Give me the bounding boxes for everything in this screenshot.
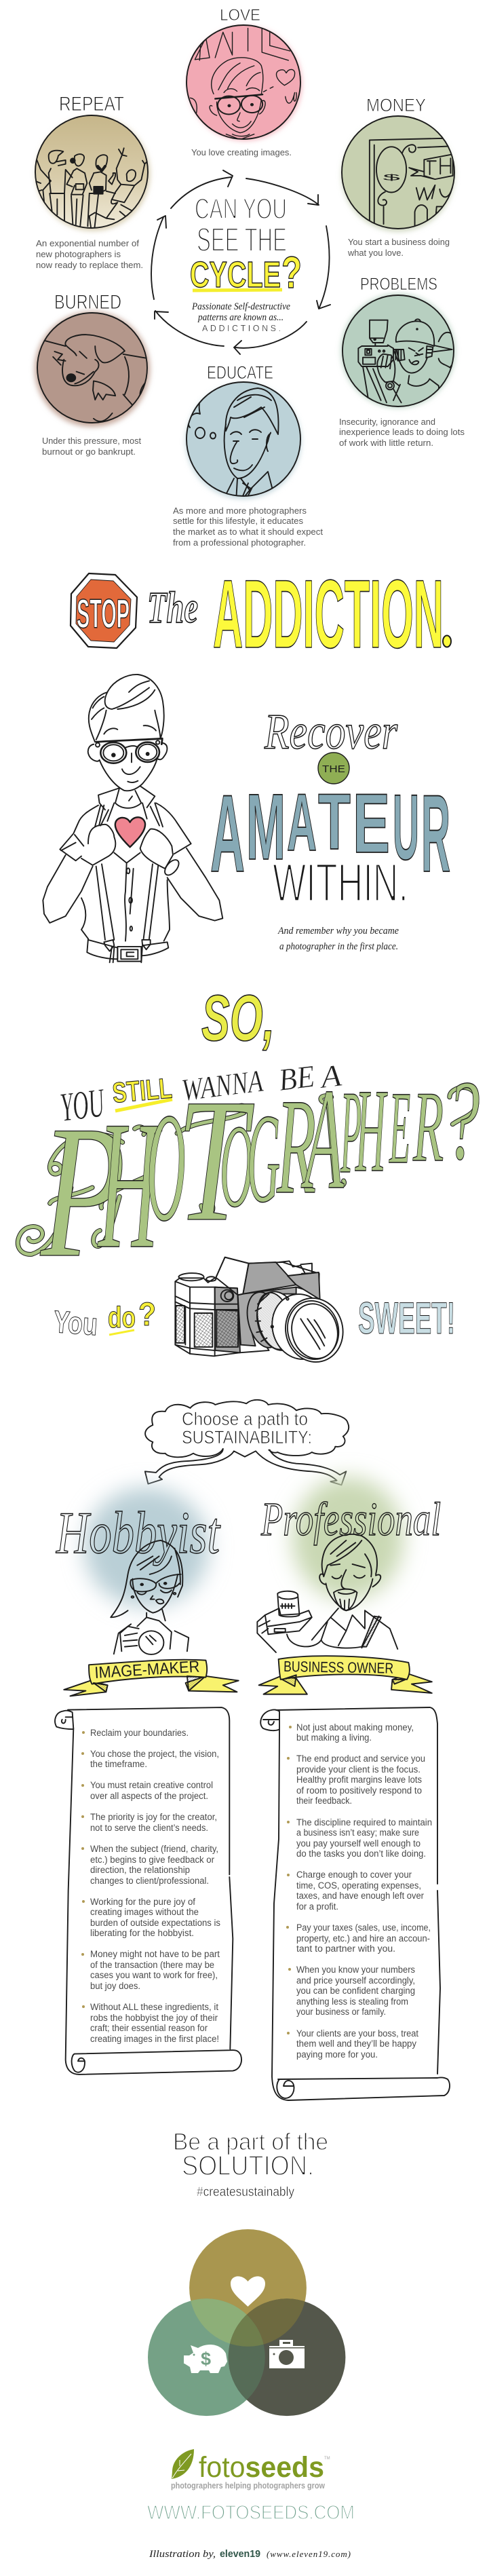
still underline [115, 1099, 172, 1111]
caption: educate: settle for this lifestyle, it educates [173, 516, 303, 526]
caption: repeat: new photographers is [36, 249, 121, 259]
icon: heart [231, 2276, 265, 2307]
caption: burned: Under this pressure, most [42, 436, 141, 446]
trademark: TM [324, 2457, 330, 2461]
scroll outline [55, 1707, 241, 2075]
professional bullet list: time, COS, operating expenses, [296, 1880, 421, 1891]
hobbyist bullet list: creating images without the [90, 1907, 199, 1917]
icon: slr camera [175, 1257, 350, 1368]
heading: solution: SOLUTION. [182, 2150, 314, 2181]
illustration: money circle: $ [383, 173, 400, 182]
heading line: you still wanna be a: A [317, 1058, 344, 1095]
hobbyist bullet list: etc.) begins to give feedback or [90, 1855, 215, 1865]
hand lettering: you do [52, 1297, 156, 1342]
heading: photographer: P [340, 1066, 361, 1198]
heading line: you still wanna be a: BE [277, 1059, 317, 1097]
professional bullet list: paying more for you. [296, 2049, 378, 2060]
hobbyist bullet list: but joy does. [90, 1981, 140, 1991]
caption: money: You start a business doing [348, 237, 450, 247]
heading: BURNED: BURNED [54, 291, 121, 314]
professional bullet list: Your clients are your boss, treat [296, 2028, 418, 2039]
caption: problems: inexperience leads to doing lots [339, 427, 465, 437]
scroll outline [260, 1707, 450, 2100]
hashtag: #createsustainably [197, 2185, 294, 2199]
title: can you see the cycle: ADDICTIONS. [202, 324, 281, 333]
illustration: repeat circle [35, 115, 150, 231]
banner: image-maker [64, 1658, 239, 1696]
heading period [443, 635, 451, 647]
heading: amateur: E [353, 777, 390, 871]
badge: the [318, 753, 349, 784]
heading: photographer: ? [446, 1057, 480, 1183]
heading: so: SO, [201, 982, 275, 1055]
professional bullet list: Pay your taxes (sales, use, income, [296, 1922, 431, 1933]
illustration: love circle [187, 25, 302, 140]
panel: the cycle [35, 6, 465, 548]
heading: MONEY: MONEY [366, 95, 426, 115]
icon: stop sign: STOP [77, 591, 130, 637]
title: can you see the cycle: patterns are known as... [197, 312, 283, 323]
website url: WWW.FOTOSEEDS.COM [147, 2502, 355, 2524]
heading: amateur: T [318, 778, 351, 867]
illustration: problems circle [341, 294, 455, 408]
tagline: photographers helping photographers grow [171, 2480, 326, 2490]
heading: amateur: M [246, 775, 286, 879]
hobbyist bullet list: You must retain creative control [90, 1780, 213, 1790]
professional bullet list: The discipline required to maintain [296, 1817, 432, 1827]
professional bullet list: their feedback. [296, 1796, 352, 1806]
heading: REPEAT: REPEAT [59, 93, 124, 115]
hand lettering: you do: You [52, 1304, 99, 1342]
heading: photographer: E [389, 1069, 410, 1186]
professional bullet list: you can be confident charging [296, 1986, 415, 1996]
heading line: you still wanna be a: WANNA [180, 1063, 265, 1107]
cloud text: SUSTAINABILITY: [182, 1427, 312, 1447]
professional bullet list: Healthy profit margins leave lots [296, 1775, 422, 1785]
heading line: you still wanna be a: STILL [111, 1072, 173, 1109]
note: remember why [277, 926, 399, 952]
banner: image-maker: IMAGE-MAKER [94, 1658, 200, 1682]
heading: amateur: R [421, 772, 450, 895]
hobbyist bullet list: not to serve the client’s needs. [90, 1823, 208, 1833]
caption: money [347, 237, 450, 258]
credit line: (www.eleven19.com) [267, 2549, 351, 2559]
professional bullet list: you pay yourself well enough to [296, 1838, 420, 1849]
caption: burned: burnout or go bankrupt. [42, 447, 136, 457]
heading: photographer: H [97, 1082, 163, 1287]
heading: photographer: P [39, 1086, 125, 1298]
hobbyist bullet list: Working for the pure joy of [90, 1897, 195, 1907]
heading: photographer: O [220, 1100, 253, 1232]
hobbyist bullet list: Without ALL these ingredients, it [90, 2002, 218, 2012]
professional bullet list: but making a living. [296, 1732, 372, 1743]
note: remember why: a photographer in the first place. [279, 941, 398, 952]
professional bullet list: a business isn’t easy; make sure [296, 1827, 419, 1838]
professional bullet list: provide your client is the focus. [296, 1764, 420, 1775]
logo: fotoseeds [147, 2449, 355, 2560]
title: can you see the cycle: CYCLE [190, 254, 281, 295]
glow behind professional [292, 1477, 404, 1599]
heading: photographer: A [300, 1058, 345, 1219]
caption: repeat: now ready to replace them. [36, 260, 143, 270]
hobbyist bullet list: over all aspects of the project. [90, 1791, 208, 1801]
panel: hobbyist scroll [55, 1707, 241, 2075]
venn diagram [148, 2229, 345, 2416]
heading: photographer: R [276, 1071, 316, 1223]
heading line: you still wanna be a: YOU [58, 1080, 108, 1130]
icon: camera [269, 2340, 305, 2368]
title: can you see the cycle: Passionate Self-destructive [191, 301, 290, 312]
note: remember why: And remember why you became [277, 926, 399, 936]
panel: so, you still wanna be a photographer [18, 982, 480, 1368]
illustration: professional man with camera [257, 1534, 397, 1652]
title: can you see the cycle: ? [281, 247, 302, 297]
heading: amateur: U [393, 776, 419, 879]
banner: business owner: BUSINESS OWNER [283, 1658, 393, 1677]
illustration: burned circle [35, 311, 150, 427]
panel: professional scroll [260, 1707, 450, 2100]
illustration: money circle [342, 116, 454, 231]
icon: stop sign [71, 573, 137, 648]
illustration: educate circle [186, 382, 301, 502]
caption: educate [173, 506, 323, 548]
cloud text: Choose a path to [182, 1409, 308, 1429]
hobbyist bullet list: burden of outside expectations is [90, 1918, 220, 1928]
hand lettering: you do: ? [138, 1297, 156, 1333]
professional bullet list: property, etc.) and hire an accoun- [296, 1933, 430, 1944]
professional bullet list: do the tasks you don’t like doing. [296, 1849, 426, 1859]
heading: photographer: G [247, 1087, 280, 1229]
caption: money: what you love. [347, 248, 404, 258]
credit line [149, 2548, 351, 2560]
heading: within: WITHIN. [273, 852, 408, 913]
professional bullet list: for a profit. [296, 1901, 338, 1912]
caption: repeat [36, 238, 143, 270]
heading: PROBLEMS: PROBLEMS [360, 275, 437, 294]
caption: problems: of work with little return. [339, 438, 433, 448]
cloud text [182, 1409, 312, 1447]
panel: be a part of the solution [148, 2129, 345, 2416]
caption: educate: from a professional photographer. [173, 537, 306, 548]
professional bullet list: When you know your numbers [296, 1965, 415, 1975]
professional bullet list: and price yourself accordingly, [296, 1975, 415, 1986]
hobbyist bullet list: liberating for the hobbyist. [90, 1928, 194, 1938]
hobbyist bullet list: Reclaim your boundaries. [90, 1728, 189, 1738]
credit line: eleven19 [220, 2548, 260, 2560]
title: can you see the cycle: SEE THE [197, 222, 287, 259]
icon: leaf [172, 2449, 194, 2479]
caption: love: You love creating images. [191, 147, 292, 157]
glow behind hobbyist [84, 1488, 209, 1607]
hobbyist bullet list: You chose the project, the vision, [90, 1749, 219, 1759]
professional bullet list: anything less is stealing from [296, 1996, 408, 2007]
hobbyist bullet list: of the transaction (there may be [90, 1960, 214, 1970]
professional bullet list [286, 1722, 432, 2060]
hobbyist bullet list: robs the hobbyist the joy of their [90, 2013, 218, 2023]
script word: the: The [147, 583, 198, 632]
decorative ribbon swashes [18, 1087, 477, 1254]
hand lettering: you do: do [108, 1301, 136, 1334]
heading: photographer: R [412, 1071, 444, 1183]
icon: piggy bank: $ [201, 2349, 211, 2369]
hobbyist bullet list: changes to client/professional. [90, 1876, 209, 1886]
heading: be a part of the: Be a part of the [173, 2129, 328, 2155]
script word: recover: Recover [264, 704, 398, 760]
caption: problems: Insecurity, ignorance and [339, 417, 435, 427]
professional bullet list: Charge enough to cover your [296, 1870, 412, 1880]
title: can you see the cycle [190, 193, 302, 333]
caption: burned [42, 436, 141, 457]
caption: educate: As more and more photographers [173, 506, 307, 516]
illustration: hobbyist woman with camera [111, 1540, 189, 1654]
heading: amateur: A [210, 773, 245, 895]
hobbyist bullet list: Money might not have to be part [90, 1949, 220, 1959]
heading: amateur [210, 772, 450, 895]
hobbyist bullet list: When the subject (friend, charity, [90, 1844, 218, 1854]
hobbyist bullet list: craft; their essential reason for [90, 2023, 208, 2033]
professional bullet list: taxes, and have enough left over [296, 1891, 425, 1901]
speech cloud and arrows [145, 1400, 349, 1485]
banner: business owner [259, 1656, 432, 1694]
professional bullet list: The end product and service you [296, 1754, 425, 1764]
hobbyist bullet list: creating images in the first place! [90, 2034, 219, 2044]
professional bullet list: tant to partner with you. [296, 1944, 395, 1954]
heading: photographer: T [177, 1062, 254, 1257]
heading: photographer: H [355, 1064, 388, 1197]
credit line: Illustration by, [149, 2549, 216, 2560]
heading: amateur: A [287, 778, 317, 868]
icon: piggy bank [184, 2345, 227, 2373]
hobbyist bullet list: The priority is joy for the creator, [90, 1812, 217, 1822]
script heading: hobbyist: Hobbyist [56, 1500, 221, 1566]
professional bullet list: them well and they’ll be happy [296, 2039, 416, 2049]
caption: repeat: An exponential number of [36, 238, 139, 248]
hobbyist bullet list: the timeframe. [90, 1759, 147, 1769]
hobbyist bullet list: direction, the relationship [90, 1865, 190, 1875]
panel: recover the amateur within [210, 704, 450, 952]
hobbyist bullet list: cases you want to work for free), [90, 1970, 218, 1980]
title: can you see the cycle: CAN YOU [195, 193, 287, 225]
hobbyist bullet list [81, 1728, 220, 2044]
heading line: you still wanna be a [58, 1058, 344, 1130]
heading: photographer [18, 1057, 480, 1298]
professional bullet list: Not just about making money, [296, 1722, 414, 1732]
caption: problems [339, 417, 465, 448]
panel: choose a path [56, 1400, 441, 1696]
professional bullet list: your business or family. [296, 2007, 386, 2017]
professional bullet list: of room to positively respond to [296, 1785, 422, 1796]
illustration: man opening shirt to reveal heart [43, 675, 222, 962]
badge: the: THE [322, 763, 345, 775]
panel: stop the addiction [71, 561, 451, 668]
heading: EDUCATE: EDUCATE [207, 362, 273, 383]
wordmark: fotoseeds [199, 2451, 324, 2484]
caption: educate: the market as to what it should expect [173, 527, 323, 537]
heading: photographer: O [146, 1082, 186, 1254]
arrows: cycle ring [151, 170, 330, 354]
heading: LOVE: LOVE [220, 6, 260, 24]
